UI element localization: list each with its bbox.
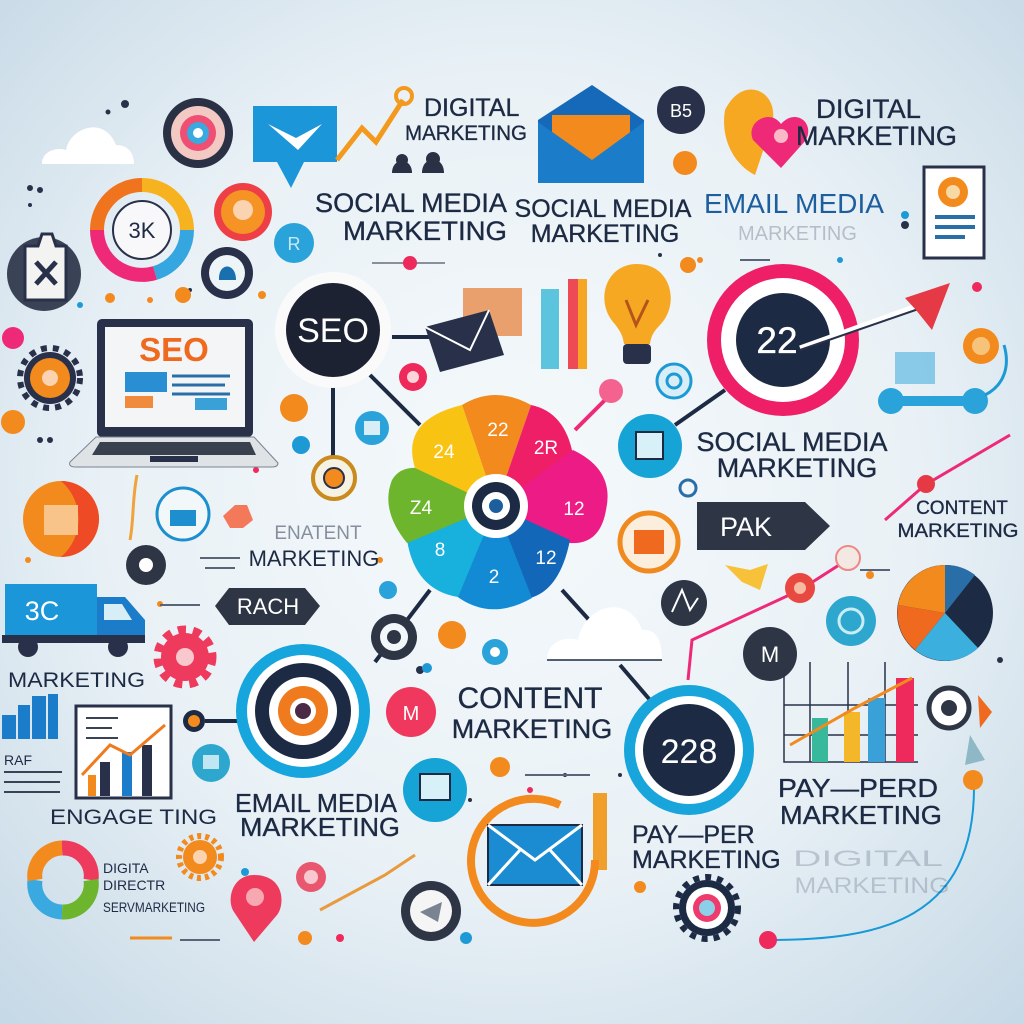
wheel glyphs: 12 xyxy=(563,499,585,520)
icon: envelope dark xyxy=(425,310,504,372)
icon: price tag: PAK xyxy=(720,512,772,542)
heading: digital marketing top right xyxy=(796,94,957,151)
heading: email media marketing: MARKETING xyxy=(240,812,400,842)
icon: pink dot on line xyxy=(917,475,935,493)
icon: dark target small xyxy=(126,545,166,585)
wheel petal: blue xyxy=(455,506,532,609)
heading: digital marketing top left: MARKETING xyxy=(405,122,527,145)
wheel petal: dark blue xyxy=(496,506,570,598)
donut label: 3K xyxy=(129,218,156,243)
heading: content marketing left: ENATENT xyxy=(274,523,362,544)
heading: social media marketing 1: SOCIAL MEDIA xyxy=(315,188,507,218)
icon: tag RACH: RACH xyxy=(237,594,299,619)
heading: digital marketing top left: DIGITAL xyxy=(424,94,519,122)
small scattered marks xyxy=(25,100,1003,945)
icon: ring badge xyxy=(201,247,253,299)
icon: small blue square badge xyxy=(355,411,389,445)
icon: dark ring right xyxy=(929,688,969,728)
heading: content marketing centre: CONTENT xyxy=(458,682,602,715)
icon: target node xyxy=(371,614,417,660)
wheel petal: green xyxy=(388,468,496,543)
icon: arrow into bullseye xyxy=(800,283,950,350)
icon: light node xyxy=(836,546,860,570)
heading: pay per marketing centre: MARKETING xyxy=(632,846,781,874)
icon: small ring xyxy=(680,480,696,496)
wheel glyphs: 8 xyxy=(435,540,445,561)
icon: truck: 3C xyxy=(25,596,59,626)
icon: blue tools xyxy=(878,352,988,414)
icon: blue dot xyxy=(379,581,397,599)
heading: email media marketing: EMAIL MEDIA xyxy=(235,788,398,818)
chart: bars report left xyxy=(2,694,171,798)
heading: pay per marketing centre xyxy=(632,821,781,874)
icon: bar stripes xyxy=(541,279,587,369)
label: engaging: ENGAGE TING xyxy=(50,806,217,829)
wheel hub xyxy=(464,474,528,538)
icon: cloud top left xyxy=(42,127,134,164)
icon: pink badge: M xyxy=(403,703,419,725)
icon: pink dot SEO side xyxy=(399,363,427,391)
icon: ring 228 xyxy=(624,685,754,815)
heading: social media marketing right: SOCIAL MEDIA xyxy=(696,427,888,457)
icon: scattered colour marks xyxy=(965,695,992,765)
icon: chat bubble xyxy=(253,106,337,188)
icon: node small xyxy=(183,710,205,732)
label: marketing left: MARKETING xyxy=(8,669,145,692)
icon: connector node xyxy=(785,573,815,603)
icon: people xyxy=(392,152,444,173)
wheel glyphs: 2 xyxy=(489,567,499,588)
faded label right bottom xyxy=(793,846,950,898)
icon: document xyxy=(924,167,984,258)
heading: social media marketing 1 xyxy=(315,188,507,246)
heading: social media marketing 2: MARKETING xyxy=(531,220,679,248)
laptop label: SEO xyxy=(139,331,209,368)
icon: envelope top xyxy=(538,85,644,183)
icon: dark chart badge xyxy=(661,580,707,626)
icon: price tag xyxy=(697,502,830,550)
icon: dark ring bottom xyxy=(401,881,461,941)
icon: hearts xyxy=(724,90,808,175)
heading: content marketing centre xyxy=(452,682,612,744)
heading: pay per marketing right: PAY—PERD xyxy=(778,773,938,803)
heading: content marketing left: MARKETING xyxy=(249,546,379,571)
heading: content marketing right xyxy=(898,498,1018,542)
heading: social media marketing 2: SOCIAL MEDIA xyxy=(515,195,692,223)
heading: social media marketing 2 xyxy=(515,195,692,248)
icon: ring on connector xyxy=(313,457,355,499)
label: digital services: DIGITA xyxy=(103,860,149,876)
icon: light bulb xyxy=(604,264,671,364)
icon: teal badge xyxy=(826,596,876,646)
icon: ring 228: 228 xyxy=(661,733,717,771)
icon: dark circle badge xyxy=(657,86,705,134)
heading: pay per marketing centre: PAY—PER xyxy=(632,821,755,849)
icon: blue ring dot xyxy=(482,639,508,665)
label: digital services: SERVMARKETING xyxy=(103,899,205,915)
icon: big blue target xyxy=(236,644,370,778)
icon: orange ring right xyxy=(963,328,999,364)
faded label right bottom: DIGITAL xyxy=(793,846,943,871)
icon: gear dark bottom xyxy=(676,877,738,939)
heading: content marketing centre: MARKETING xyxy=(452,714,612,744)
icon: map pin xyxy=(231,875,281,942)
icon: big envelope xyxy=(471,793,600,923)
wheel petal: orange xyxy=(462,395,531,506)
wheel glyphs: 12 xyxy=(535,548,557,569)
heading: content marketing right: MARKETING xyxy=(898,521,1018,542)
icon: small pink dot xyxy=(2,327,24,349)
icon: faded orange square xyxy=(463,288,522,336)
icon: orange gear xyxy=(179,836,221,878)
heading: email media marketing xyxy=(235,788,400,842)
heading: content marketing right: CONTENT xyxy=(916,498,1008,519)
label: digital services: DIRECTR xyxy=(103,877,165,893)
icon: pink badge xyxy=(386,687,436,737)
icon: cloud centre xyxy=(547,607,662,660)
icon: teal ring xyxy=(657,364,691,398)
icon: pink small badge xyxy=(296,862,326,892)
icon: blue small badge xyxy=(192,744,230,782)
arc right xyxy=(985,345,1006,395)
heading: digital marketing top left xyxy=(405,94,527,145)
heading: social media marketing right: MARKETING xyxy=(717,453,877,483)
icon: central color wheel xyxy=(388,395,608,609)
icon: dark badge MI xyxy=(743,627,797,681)
icon: blue circle square xyxy=(618,414,682,478)
icon: red bullseye xyxy=(707,264,859,416)
icon: small orange dots xyxy=(280,257,983,790)
label: digital services xyxy=(103,860,205,915)
icon: orange badge left xyxy=(23,481,99,557)
icon: orange line bottom xyxy=(130,936,172,940)
icon: orange hexagon xyxy=(223,505,253,528)
icon: donut bottom left xyxy=(35,848,91,912)
heading: pay per marketing right xyxy=(778,773,942,830)
icon: yellow splash xyxy=(725,564,768,590)
icon: cyan ring middle left xyxy=(157,488,209,540)
wheel petal: cyan xyxy=(407,506,496,597)
icon: blue dot R xyxy=(274,223,314,263)
icon: blue dot R: R xyxy=(288,234,300,254)
wheel glyphs: 22 xyxy=(487,420,509,441)
icon: orange badge xyxy=(214,183,272,241)
wheel glyphs: 24 xyxy=(433,442,455,463)
heading: content marketing left xyxy=(249,523,379,571)
line mark xyxy=(130,475,137,540)
icon: pink gear xyxy=(158,630,212,684)
icon: laptop SEO xyxy=(70,319,278,467)
icon: orange ring xyxy=(620,513,678,571)
icon: blue badge message xyxy=(403,758,467,822)
icon: donut 3K xyxy=(97,185,187,275)
icon: orange dot left xyxy=(1,410,25,434)
icon: SEO circle: SEO xyxy=(297,312,369,350)
heading: digital marketing top right: DIGITAL xyxy=(816,94,921,124)
icon: red bullseye: 22 xyxy=(756,320,798,361)
icon: dark badge MI: M xyxy=(761,642,779,667)
icon: truck xyxy=(2,584,145,657)
wheel petal: magenta xyxy=(496,450,608,543)
faded label right bottom: MARKETING xyxy=(794,873,950,898)
icon: connector end dot xyxy=(759,931,777,949)
connector lines xyxy=(205,263,1010,940)
wheel glyphs: Z4 xyxy=(410,498,433,519)
icon: clipboard xyxy=(7,234,81,311)
heading: email media: EMAIL MEDIA xyxy=(704,188,884,219)
faded label: MARKETING xyxy=(738,223,857,245)
icon: orange dot xyxy=(673,151,697,175)
chart: bar chart right xyxy=(784,662,918,762)
icon: concentric target top left xyxy=(163,98,233,168)
chart: pie right xyxy=(897,565,993,661)
icon: tag RACH xyxy=(215,588,320,625)
wheel petal: yellow xyxy=(412,405,496,506)
heading: digital marketing top right: MARKETING xyxy=(796,121,957,151)
icon: gear orange xyxy=(20,348,80,408)
wheel petal: pink xyxy=(496,405,573,506)
heading: social media marketing 1: MARKETING xyxy=(343,216,507,246)
wheel glyphs: 2R xyxy=(534,438,558,459)
icon: orange arrow xyxy=(320,855,415,910)
chart: bars report left: RAF xyxy=(4,752,32,768)
icon: dark circle badge: B5 xyxy=(670,101,692,121)
wheel glyphs xyxy=(410,420,585,588)
icon: SEO circle xyxy=(275,272,391,388)
heading: pay per marketing right: MARKETING xyxy=(780,800,942,830)
icon: pink pin on line xyxy=(599,379,623,403)
heading: social media marketing right xyxy=(696,427,888,483)
icon: rising arrow xyxy=(337,88,412,160)
